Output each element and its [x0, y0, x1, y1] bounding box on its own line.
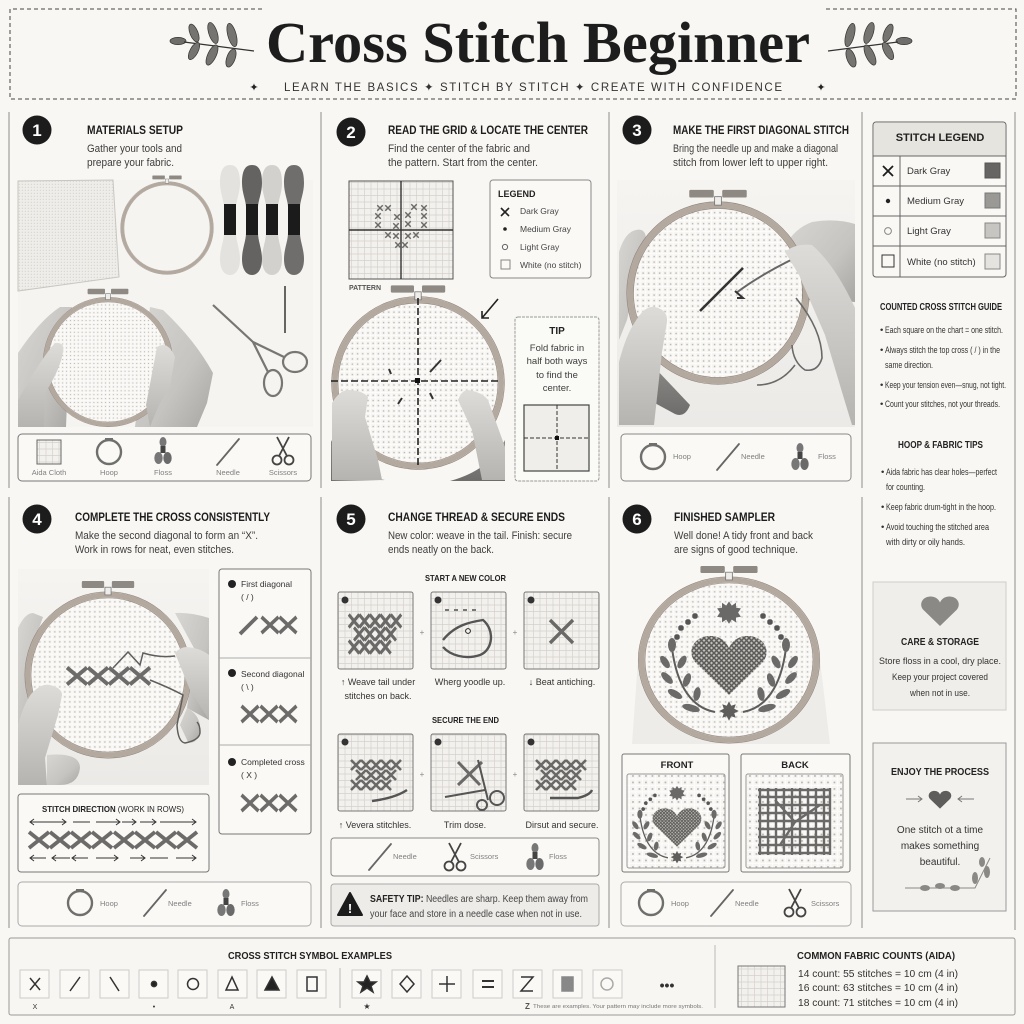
- step 5 heading: CHANGE THREAD & SECURE ENDS: [388, 510, 565, 524]
- right laurel icon: [828, 21, 912, 68]
- fabric counts: 18 count: 71 stitches = 10 cm (4 in): [798, 998, 958, 1009]
- icon row: Needle: [393, 852, 417, 861]
- icon labels: Scissors: [269, 468, 297, 477]
- stitch direction box: [18, 794, 209, 872]
- icon legend row: [18, 434, 311, 481]
- left sparkle: ✦: [249, 82, 259, 94]
- photo: hands stitching first diagonal: [617, 180, 855, 427]
- symbol captions: A: [230, 1004, 235, 1011]
- step 4 description: [75, 530, 258, 556]
- step 2 description: the pattern. Start from the center.: [388, 157, 538, 169]
- step 5 description: New color: weave in the tail. Finish: secure: [388, 530, 572, 542]
- icon: aida cloth: [37, 440, 61, 464]
- start a new color label: START A NEW COLOR: [425, 573, 506, 583]
- tip box: half both ways: [527, 356, 588, 367]
- panel dividers: [9, 112, 1015, 930]
- panel: step 6 finished sampler: [621, 504, 851, 926]
- sprig: [905, 857, 990, 891]
- fabric counts: [798, 969, 958, 1009]
- icon row: Floss: [241, 899, 259, 908]
- hoop and fabric tips: •: [881, 467, 884, 478]
- photo: empty hoop: [121, 176, 213, 274]
- tip box: [515, 317, 599, 481]
- photo: hands holding hoop: [18, 289, 213, 427]
- step number 1: 1: [32, 121, 42, 140]
- hoop and fabric tips: for counting.: [886, 482, 925, 493]
- symbols note: These are examples. Your pattern may include more symbols.: [533, 1004, 704, 1010]
- photo: scissors: [213, 305, 307, 396]
- care and storage card: when not in use.: [909, 688, 970, 699]
- step 6 heading: FINISHED SAMPLER: [674, 510, 775, 524]
- icon row: [621, 434, 851, 481]
- stitch legend table: Light Gray: [907, 226, 951, 237]
- hoop and fabric tips: •: [881, 522, 884, 533]
- legend box: LEGEND: [498, 189, 536, 199]
- operator plus signs: [420, 628, 518, 637]
- care and storage card: Keep your project covered: [892, 672, 988, 683]
- captions row one: Wherg yoodle up.: [435, 677, 505, 687]
- step 3 description: stitch from lower left to upper right.: [673, 157, 828, 169]
- more symbols ellipsis: •••: [660, 977, 674, 993]
- icon row: Hoop: [100, 899, 118, 908]
- operator plus signs: +: [513, 770, 518, 779]
- operator plus signs: +: [420, 628, 425, 637]
- symbol captions: •: [153, 1004, 156, 1011]
- photo: floss skeins: [220, 165, 304, 275]
- icon row: Needle: [735, 899, 759, 908]
- step 1 heading: MATERIALS SETUP: [87, 123, 183, 137]
- tile: bring needle up: [431, 592, 506, 669]
- captions row two: Trim dose.: [444, 820, 486, 830]
- second diagonal: Second diagonal: [241, 669, 304, 679]
- step 5 description: ends neatly on the back.: [388, 544, 494, 556]
- photo: finished sampler in hoop: [632, 566, 830, 744]
- stitch legend table: Medium Gray: [907, 196, 964, 207]
- step 6 description: Well done! A tidy front and back: [674, 530, 813, 542]
- left laurel icon: [170, 21, 254, 68]
- step 3 description: Bring the needle up and make a diagonal: [673, 143, 838, 155]
- symbol captions: ★: [363, 1002, 371, 1011]
- icon: scissors: [272, 437, 294, 464]
- symbol captions: X: [33, 1004, 38, 1011]
- legend box: Medium Gray: [520, 224, 572, 234]
- icon labels: Needle: [216, 468, 240, 477]
- icon: floss: [154, 437, 172, 464]
- legend box: Dark Gray: [520, 206, 559, 216]
- tip box: TIP: [549, 326, 565, 337]
- care and storage card: CARE & STORAGE: [901, 637, 979, 648]
- first diagonal: ( / ): [241, 592, 254, 602]
- hoop and fabric tips: HOOP & FABRIC TIPS: [898, 440, 983, 451]
- captions row one: ↓ Beat antiching.: [529, 677, 595, 687]
- step number 4: [22, 504, 52, 534]
- step 1 description: [87, 143, 182, 169]
- icon row: Floss: [818, 452, 836, 461]
- stitch legend table: [873, 122, 1006, 277]
- step 4 description: Make the second diagonal to form an “X”.: [75, 530, 258, 542]
- front view card: [622, 754, 729, 872]
- safety tip box: your face and store in a needle case when not in use.: [370, 909, 582, 920]
- counted cross stitch guide: •: [880, 325, 883, 336]
- tile: trim close: [431, 734, 506, 811]
- photo: hands completing crosses: [18, 569, 209, 785]
- captions row one: ↑ Weave tail under: [341, 677, 415, 687]
- fabric counts: 16 count: 63 stitches = 10 cm (4 in): [798, 983, 958, 994]
- fabric counts heading: COMMON FABRIC COUNTS (AIDA): [797, 951, 955, 962]
- enjoy the process card: ENJOY THE PROCESS: [891, 767, 989, 778]
- icon: warning triangle: !: [348, 901, 352, 916]
- enjoy the process card: makes something: [901, 841, 979, 852]
- step number 4: 4: [32, 510, 42, 529]
- legend box: White (no stitch): [520, 260, 582, 270]
- symbol tiles: [20, 970, 622, 998]
- captions row one: stitches on back.: [344, 691, 412, 701]
- icon: warning triangle: [338, 893, 362, 916]
- captions row one: [341, 677, 595, 701]
- icon row: Floss: [549, 852, 567, 861]
- stitch legend table: STITCH LEGEND: [896, 132, 984, 144]
- header dashed frame: [10, 9, 1016, 99]
- icon: needle: [217, 439, 239, 465]
- panel: step 5 change thread: [331, 504, 599, 926]
- panel: step 2 read the grid: [331, 118, 599, 481]
- photo: hoop with center marks: [331, 285, 505, 481]
- captions row two: Dirsut and secure.: [525, 820, 599, 830]
- hoop and fabric tips: Avoid touching the stitched area: [886, 522, 990, 533]
- step 2 description: [388, 143, 538, 169]
- symbols heading: CROSS STITCH SYMBOL EXAMPLES: [228, 951, 392, 962]
- completed cross: [228, 757, 305, 811]
- step number 5: 5: [346, 510, 356, 529]
- fold diagram: [524, 405, 589, 471]
- first diagonal: First diagonal: [241, 579, 292, 589]
- stitch direction box: STITCH DIRECTION (WORK IN ROWS): [42, 804, 184, 814]
- legend box: [490, 180, 591, 278]
- step 2 heading: READ THE GRID & LOCATE THE CENTER: [388, 123, 588, 137]
- stitch legend table: White (no stitch): [907, 257, 976, 268]
- fabric counts: 14 count: 55 stitches = 10 cm (4 in): [798, 969, 958, 980]
- safety tip box: SAFETY TIP: Needles are sharp. Keep them away from: [370, 894, 588, 905]
- icon row: Needle: [741, 452, 765, 461]
- tile: begin stitching: [524, 592, 599, 669]
- step number 6: [622, 504, 652, 534]
- symbols note: [525, 1002, 704, 1011]
- operator plus signs: +: [513, 628, 518, 637]
- header banner: [10, 9, 1016, 99]
- right sparkle: ✦: [816, 82, 826, 94]
- step 4 description: Work in rows for neat, even stitches.: [75, 544, 234, 556]
- step number 3: 3: [632, 121, 642, 140]
- panel: step 4 complete the cross: [18, 504, 311, 926]
- captions row two: ↑ Vevera stitchles.: [339, 820, 411, 830]
- care and storage card: [873, 582, 1006, 710]
- icon: hoop: [97, 438, 121, 464]
- operator plus signs: [420, 770, 518, 779]
- operator plus signs: +: [420, 770, 425, 779]
- step 6 description: are signs of good technique.: [674, 544, 798, 556]
- fabric swatch: [738, 966, 785, 1007]
- icon row: Needle: [168, 899, 192, 908]
- panel: right column legend and tips: [873, 122, 1006, 911]
- first diagonal: [228, 579, 296, 634]
- secure the end label: SECURE THE END: [432, 715, 499, 725]
- icon row: [331, 838, 599, 876]
- title: Cross Stitch Beginner: [266, 10, 810, 75]
- tip box: to find the: [536, 370, 578, 381]
- icon labels: Aida Cloth: [32, 468, 66, 477]
- step 6 description: [674, 530, 813, 556]
- icon labels: Hoop: [100, 468, 118, 477]
- second diagonal: ( \ ): [241, 682, 254, 692]
- step number 1: [22, 116, 52, 144]
- chart caption: PATTERN: [349, 285, 381, 292]
- step number 5: [336, 504, 366, 534]
- step 3 description: [673, 143, 838, 169]
- back view card: BACK: [781, 760, 809, 771]
- counted cross stitch guide: •: [880, 345, 883, 356]
- icon row: Scissors: [811, 899, 840, 908]
- photo backdrop: [18, 180, 313, 427]
- back view card: [741, 754, 850, 872]
- panel: step 3 first diagonal: [617, 116, 855, 481]
- tagline: LEARN THE BASICS ✦ STITCH BY STITCH ✦ CREATE WITH CONFIDENCE: [284, 82, 782, 94]
- enjoy the process card: beautiful.: [920, 857, 960, 868]
- stitch legend table: Dark Gray: [907, 166, 951, 177]
- legend box: Light Gray: [520, 242, 560, 252]
- enjoy the process card: One stitch ot a time: [897, 825, 984, 836]
- tile: weave stitches: [338, 734, 413, 811]
- icon row: [621, 882, 851, 926]
- icon row: Scissors: [470, 852, 499, 861]
- step 5 description: [388, 530, 572, 556]
- step 2 description: Find the center of the fabric and: [388, 143, 530, 155]
- panel: step 1 materials setup: [18, 116, 313, 481]
- counted cross stitch guide: •: [880, 399, 883, 410]
- photo: needle: [284, 286, 286, 333]
- symbols note: Z: [525, 1002, 530, 1011]
- hoop and fabric tips: with dirty or oily hands.: [885, 537, 965, 548]
- enjoy the process card: [873, 743, 1006, 911]
- icon row: Hoop: [673, 452, 691, 461]
- tile: weave tail: [338, 592, 413, 669]
- step number 6: 6: [632, 510, 642, 529]
- photo: folded aida cloth: [18, 180, 119, 291]
- counted cross stitch guide: [880, 302, 1006, 410]
- safety tip box: [331, 884, 599, 926]
- tile: knot and secure: [524, 734, 599, 811]
- step number 2: [336, 118, 366, 146]
- icon labels: Floss: [154, 468, 172, 477]
- symbol glyphs: [30, 976, 613, 992]
- icon labels: [32, 468, 297, 477]
- step 3 heading: MAKE THE FIRST DIAGONAL STITCH: [673, 123, 849, 137]
- step number 2: 2: [346, 123, 356, 142]
- panel: bottom symbols strip: [9, 938, 1015, 1015]
- hoop and fabric tips: [881, 440, 997, 548]
- completed cross: Completed cross: [241, 757, 305, 767]
- hoop and fabric tips: •: [881, 502, 884, 513]
- chart: pattern grid with heart: [349, 181, 453, 279]
- step 1 description: prepare your fabric.: [87, 157, 174, 169]
- captions row two: [339, 820, 599, 830]
- counted cross stitch guide: •: [880, 380, 883, 391]
- stitch steps side box: [219, 569, 311, 834]
- icon row: Hoop: [671, 899, 689, 908]
- step 1 description: Gather your tools and: [87, 143, 182, 155]
- step number 3: [622, 116, 652, 144]
- tip box: center.: [543, 383, 571, 394]
- front view card: FRONT: [661, 760, 694, 771]
- icon row: [18, 882, 311, 926]
- tip box: Fold fabric in: [530, 343, 584, 354]
- completed cross: ( X ): [241, 770, 257, 780]
- second diagonal: [228, 669, 304, 722]
- step 4 heading: COMPLETE THE CROSS CONSISTENTLY: [75, 510, 270, 524]
- counted cross stitch guide: same direction.: [885, 360, 933, 371]
- symbol captions: [33, 1002, 371, 1011]
- care and storage card: Store floss in a cool, dry place.: [879, 656, 1001, 667]
- arrow to hoop: [482, 299, 498, 318]
